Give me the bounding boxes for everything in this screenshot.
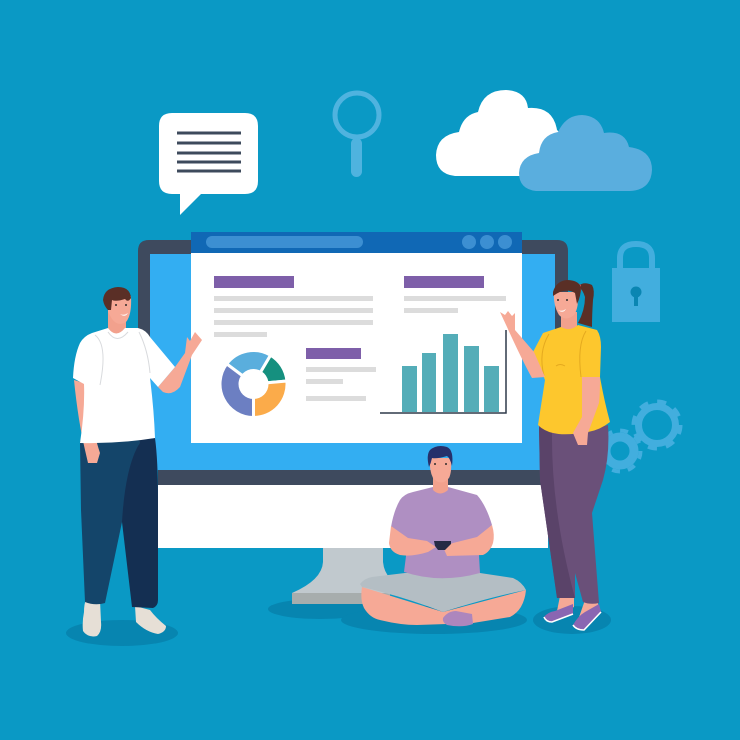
head: [430, 458, 451, 482]
head: [554, 292, 578, 318]
ponytail: [578, 283, 594, 327]
trousers left leg: [80, 440, 140, 604]
shoes: [544, 604, 573, 622]
monitor frame: [138, 240, 568, 484]
left arm: [74, 380, 100, 463]
hair: [103, 287, 131, 310]
shoes: [83, 600, 101, 636]
bar chart: [380, 330, 506, 413]
monitor stand: [292, 548, 390, 603]
text placeholder lines left: [214, 276, 373, 337]
ground shadows: [66, 599, 611, 646]
neck: [561, 312, 577, 332]
neck: [433, 474, 448, 494]
head: [108, 296, 131, 324]
trousers: [539, 425, 608, 604]
face details: [557, 299, 568, 301]
shirt: [533, 325, 610, 434]
neck: [108, 312, 126, 336]
left forearm: [389, 526, 436, 556]
shoe soles: [544, 612, 601, 630]
monitor screen: [150, 254, 555, 470]
shirt seams: [542, 331, 586, 377]
shirt: [73, 328, 175, 443]
right arm: [158, 332, 202, 393]
icon: speech bubble: [159, 113, 258, 215]
phone: [434, 541, 451, 550]
monitor: [138, 240, 568, 604]
person: man in white shirt: [73, 287, 202, 636]
icon: padlock: [612, 244, 660, 322]
face details: [434, 463, 447, 465]
icon: magnifying glass: [335, 93, 379, 177]
text placeholder lines right: [404, 276, 506, 313]
shirt collar and sleeve lines: [95, 332, 150, 385]
raised arm: [500, 311, 545, 378]
hair: [553, 280, 581, 304]
foot: [443, 611, 473, 626]
person: woman in yellow shirt: [500, 280, 610, 630]
hair band: [577, 283, 581, 292]
legs: [361, 587, 526, 625]
monitor chin: [158, 485, 548, 548]
browser window: [191, 232, 522, 443]
lower arm: [573, 377, 600, 445]
trousers right leg: [100, 438, 158, 608]
icon: gears: [600, 402, 680, 472]
shirt: [391, 487, 492, 578]
icon: blue cloud: [519, 115, 652, 191]
mini text block: [306, 348, 376, 401]
right forearm: [443, 525, 494, 556]
browser title bar: [191, 232, 522, 253]
feet: [556, 596, 598, 620]
donut chart: [220, 351, 287, 418]
browser page: [191, 253, 522, 443]
shorts: [360, 573, 526, 612]
person: seated man in lilac shirt: [360, 446, 526, 626]
icon: white cloud: [436, 90, 569, 176]
face details: [115, 304, 127, 306]
hair: [428, 446, 452, 467]
